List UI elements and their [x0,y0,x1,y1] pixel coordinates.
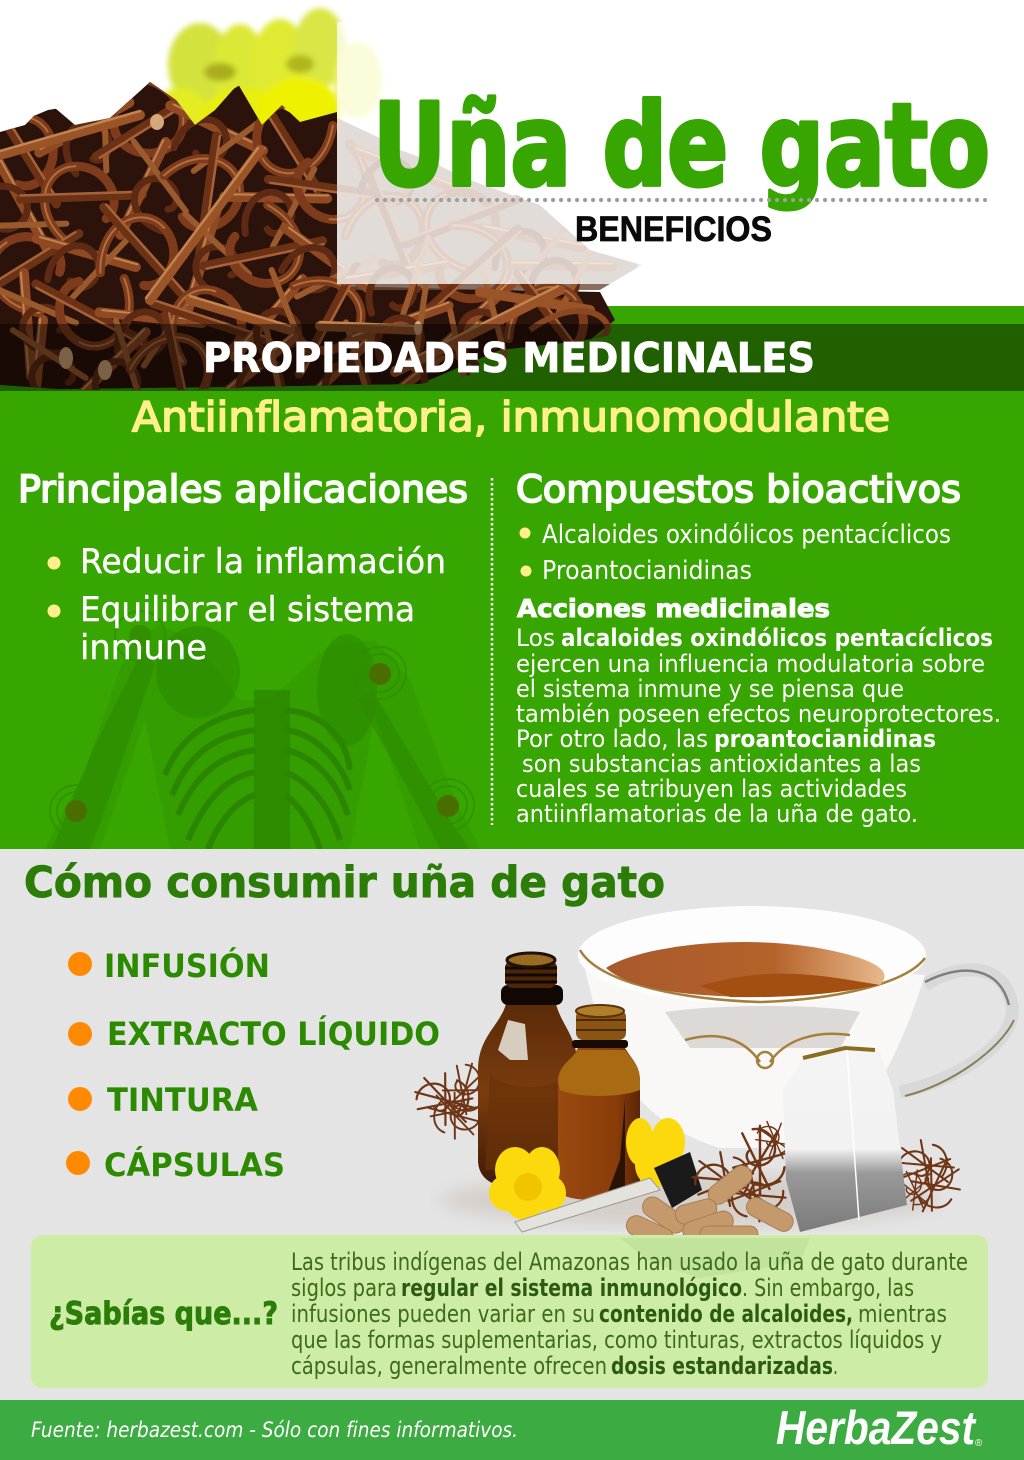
text block: medicinal actions: el sistema inmune y se piensa que [516,675,904,703]
list: consumption forms: INFUSIÓN [104,946,270,985]
list: main applications: inmune [80,628,207,668]
green properties section background [0,306,1024,849]
heading: medicinal properties: PROPIEDADES MEDICINALES [203,334,815,382]
footer bar [0,1400,1024,1460]
vertical dotted divider [491,478,493,825]
footer source note: Fuente: herbazest.com - Sólo con fines informativos. [31,1418,518,1442]
callout body text: . [833,1352,838,1380]
list: main applications: Equilibrar el sistema [80,590,415,630]
text block: medicinal actions: antiinflamatorias de la uña de gato. [516,800,918,828]
text block: medicinal actions: cuales se atribuyen las actividades [516,775,907,803]
list: main applications [48,542,446,668]
callout body text: regular el sistema inmunológico [401,1274,742,1302]
list: bioactive compounds: Proantocianidinas [542,556,752,586]
callout body text: dosis estandarizadas [611,1352,833,1380]
list: consumption forms: EXTRACTO LÍQUIDO [107,1015,440,1053]
list: main applications: Reducir la inflamación [80,542,446,582]
heading: medicinal actions: Acciones medicinales [517,594,830,623]
text block: medicinal actions: son substancias antioxidantes a las [522,750,921,778]
callout body text [291,1248,968,1380]
list: bioactive compounds [520,520,951,586]
text block: medicinal actions [516,624,1001,828]
text block: medicinal actions: ejercen una influencia modulatoria sobre [516,650,985,678]
photo: pile of cat's claw bark and hooks [0,82,642,390]
footer logo: HerbaZest: ® [975,1438,983,1449]
callout: did you know [31,1235,988,1388]
grey consumption section background [0,849,1024,1400]
faint capsules reflection [620,1238,810,1278]
callout body text: cápsulas, generalmente ofrecen [291,1352,607,1380]
text block: medicinal actions: Los [516,624,555,652]
callout body text: siglos para [291,1274,397,1302]
heading: main applications: Principales aplicaciones [18,468,468,511]
photo: yellow cat's claw flowers [150,8,382,153]
heading: bioactive compounds: Compuestos bioactivos [516,468,961,511]
dark band behind section heading [0,324,1024,391]
callout body text: infusiones pueden variar en su [291,1300,595,1328]
callout body text: mientras [858,1300,947,1328]
subheading: properties: Antiinflamatoria, inmunomodulante [132,393,890,441]
callout heading: ¿Sabías que...? [49,1296,278,1332]
text block: medicinal actions: también poseen efectos neuroprotectores. [516,700,1001,728]
text block: medicinal actions: proantocianidinas [714,725,936,753]
list: consumption forms [66,946,440,1184]
list: consumption forms: TINTURA [107,1081,258,1119]
title dotted rule [377,198,987,202]
illustration: translucent skeleton torso [45,611,480,849]
footer logo: HerbaZest: HerbaZest [776,1401,977,1454]
photo: tea cup, bottles, capsules and tea bag [408,906,1014,1252]
heading: how to consume: Cómo consumir uña de gato [24,858,665,908]
callout body text: contenido de alcaloides, [599,1300,853,1328]
list: consumption forms: CÁPSULAS [104,1146,285,1184]
subtitle: BENEFICIOS [575,210,772,249]
translucent white title panel [337,22,1024,284]
callout body text: . Sin embargo, las [742,1274,914,1302]
list: bioactive compounds: Alcaloides oxindólicos pentacíclicos [542,520,951,550]
text block: medicinal actions: Por otro lado, las [516,725,708,753]
